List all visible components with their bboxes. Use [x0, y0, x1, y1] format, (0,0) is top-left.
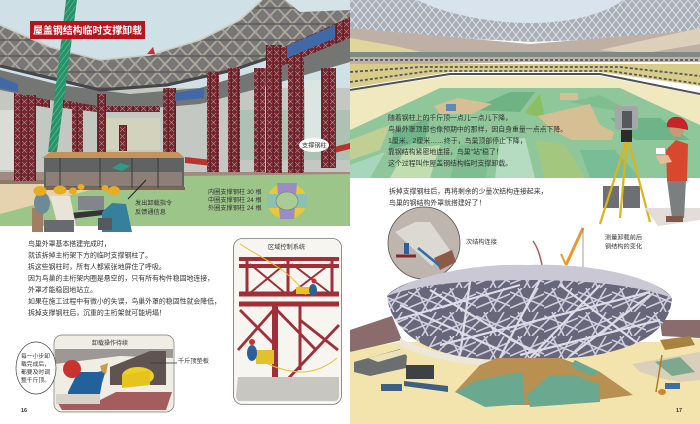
panel: left page illustration	[0, 0, 350, 232]
column counts: 外圈支撑钢柱 24 根	[208, 204, 262, 212]
roof upper chord	[0, 0, 262, 60]
text block: right page caption on field	[388, 113, 567, 168]
cranes	[533, 228, 583, 268]
page number 17: 17	[676, 408, 682, 414]
label bubble: support column: 支撑钢柱	[302, 142, 327, 150]
control cabin	[42, 152, 185, 190]
column counts: 中圈支撑钢柱 24 根	[208, 196, 262, 204]
ground: right page	[350, 338, 700, 424]
speech bubble: adjust jack	[16, 342, 56, 394]
text block: right page caption on field: 鸟巢外罩顶部也像预期中的那样，因自身重量一点点下降。	[388, 124, 567, 134]
sky	[0, 0, 350, 100]
page number 16: 16	[21, 408, 27, 414]
text block: left page body: 就该拆掉主桁架下方的临时支撑钢柱了。	[28, 250, 152, 260]
text block: left page body: 鸟巢外罩基本搭建完成时，	[28, 239, 111, 248]
text block: right page body: 拆掉支撑钢柱后，再将剩余的少量次结构连接起来，	[389, 186, 547, 196]
worker	[63, 360, 108, 394]
column counts	[208, 188, 262, 212]
label: measure change: 钢结构的变化	[605, 242, 642, 250]
cable	[240, 244, 337, 372]
label: secondary structure: 次结构连接	[466, 238, 497, 246]
engineers around table	[32, 184, 132, 232]
red support columns	[14, 17, 350, 181]
sky	[352, 0, 623, 40]
hatched ground	[236, 377, 339, 401]
panel: unloading operation	[54, 335, 174, 412]
upper stands	[350, 28, 700, 66]
hydraulic jack	[122, 367, 154, 385]
speech bubble: adjust jack: 整千斤顶。	[21, 376, 50, 384]
podium	[400, 338, 530, 366]
blue panels	[0, 25, 335, 101]
panel: regional control system	[234, 238, 342, 404]
buildings left of stadium	[354, 349, 448, 392]
field	[350, 88, 700, 178]
callout: secondary structure inset	[388, 207, 460, 283]
plan diagram of supports	[267, 183, 307, 219]
upper worker and jack	[296, 278, 317, 296]
text block: left page body: 如果在施工过程中有微小的失误，鸟巢外罩的稳固性就会降低，	[28, 296, 221, 306]
text block: right page caption on field: 这个过程叫作屋盖钢结构临时支撑卸载。	[388, 158, 512, 168]
speech bubble: adjust jack: 载完成后，	[21, 360, 50, 368]
title banner	[30, 21, 145, 39]
text block: right page caption on field: 1厘米、2厘米……终于，鸟巢顶部停止下降，	[388, 136, 527, 145]
field patches	[350, 92, 690, 178]
track ring	[350, 76, 700, 135]
text block: left page body: 因为鸟巢的主桁架内圈是悬空的，只有所有构件稳固地连接，	[28, 274, 214, 282]
surveyor in red	[645, 117, 700, 226]
red scaffold	[238, 259, 339, 382]
ground: sand	[0, 182, 90, 214]
text block: right page caption on field: 靠钢结构紧密地连接，鸟巢“站”稳了！	[388, 147, 503, 156]
panel title: 区域控制系统	[268, 243, 305, 251]
text block: left page body	[28, 239, 221, 317]
title banner: 屋盖钢结构临时支撑卸载	[33, 24, 142, 37]
seating tier	[350, 64, 700, 88]
speech bubble: adjust jack: 每一小步卸	[21, 352, 50, 360]
label bubble: support column	[299, 138, 329, 152]
stadium background	[0, 88, 350, 180]
stadium roof rim	[387, 265, 672, 298]
far roof truss	[350, 0, 700, 42]
panel: right page stadium interior	[350, 0, 700, 178]
callout: send command: 反馈通信息	[135, 208, 166, 216]
machinery base	[56, 392, 172, 410]
text block: left page body: 拆这些钢柱时，所有人都紧张地屏住了呼吸。	[28, 262, 166, 271]
soil mound with teal cover	[455, 358, 633, 407]
speech bubble: adjust jack: 都要及时调	[21, 368, 50, 376]
red flag on roof	[147, 47, 155, 54]
crane: green tower	[48, 0, 77, 152]
text block: right page body: 鸟巢的钢结构外罩就搭建好了！	[389, 198, 485, 207]
site right of stadium	[632, 336, 700, 395]
arrow to cabin	[128, 180, 146, 199]
ground: lawn	[0, 174, 350, 226]
callout: send command: 发出卸载指令	[135, 199, 173, 207]
text block: left page body: 外罩才能稳固地站立。	[28, 285, 97, 294]
distant hills	[350, 316, 700, 352]
lower truss band	[0, 38, 350, 110]
callout: jack pad: 千斤顶垫板	[178, 357, 209, 365]
callout: jack pad	[150, 357, 209, 365]
roof lower dark chord	[0, 33, 350, 90]
text block: right page caption on field: 随着钢柱上的千斤顶一点儿一点儿下降，	[388, 113, 512, 122]
label: measure change	[605, 234, 642, 250]
surveying instrument on tripod	[600, 106, 650, 224]
callout: send command	[135, 199, 173, 216]
tan patches on field	[434, 93, 614, 140]
sky corner	[285, 0, 350, 12]
label: measure change: 测量卸载前后	[605, 234, 642, 242]
stadium: Bird's Nest	[387, 265, 672, 366]
column counts: 内圈支撑钢柱 30 根	[208, 188, 262, 196]
small blue building	[446, 104, 456, 111]
roof truss main band	[0, 0, 350, 90]
lower worker and jack	[247, 339, 274, 364]
structural ribs	[395, 280, 660, 358]
panel title: 卸载操作待续	[92, 339, 128, 347]
text block: right page body	[389, 186, 547, 207]
text block: left page body: 拆掉支撑钢柱后，沉重的主桁架就可能坍塌！	[28, 308, 166, 317]
